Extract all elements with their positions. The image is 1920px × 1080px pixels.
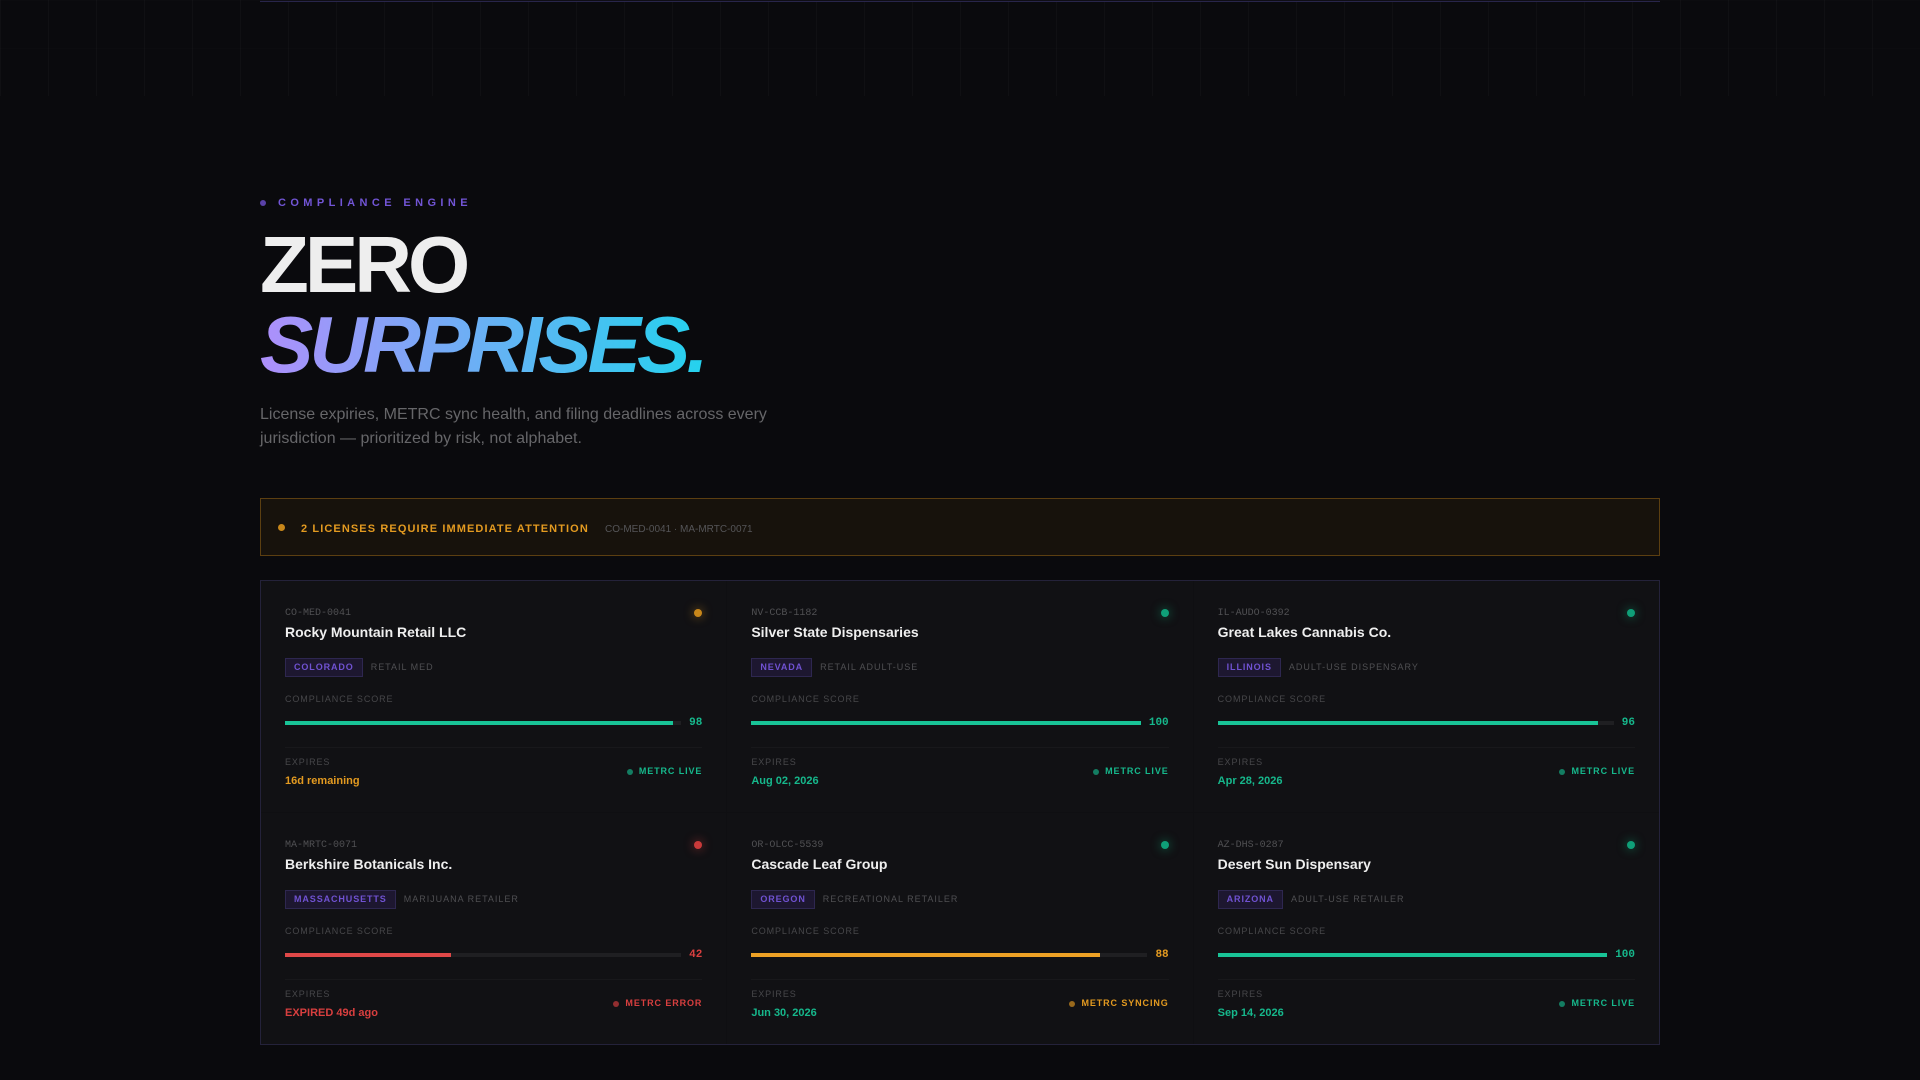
card: Great Lakes Cannabis Co.	[1194, 581, 1659, 812]
card: Cascade Leaf Group: OREGON	[760, 894, 806, 904]
card: Rocky Mountain Retail LLC: METRC LIVE	[639, 766, 702, 776]
title: ZERO	[260, 220, 466, 309]
card: Cascade Leaf Group: Cascade Leaf Group	[751, 856, 887, 872]
card: Berkshire Botanicals Inc.: COMPLIANCE SCORE	[285, 926, 393, 936]
subtitle: jurisdiction — prioritized by risk, not alphabet.	[260, 430, 582, 447]
card: Rocky Mountain Retail LLC: CO-MED-0041	[285, 608, 351, 619]
card: Desert Sun Dispensary: COMPLIANCE SCORE	[1218, 926, 1326, 936]
card: Cascade Leaf Group: METRC SYNCING	[1081, 998, 1169, 1008]
card: Desert Sun Dispensary	[1194, 813, 1659, 1044]
card: Berkshire Botanicals Inc.: MARIJUANA RETAILER	[404, 894, 519, 904]
subtitle: License expiries, METRC sync health, and filing deadlines across every	[260, 406, 767, 423]
card: Cascade Leaf Group: OR-OLCC-5539	[751, 840, 823, 851]
card: Great Lakes Cannabis Co.: 96	[1622, 717, 1635, 729]
card: Desert Sun Dispensary: 100	[1615, 949, 1635, 961]
card: Cascade Leaf Group: Jun 30, 2026	[751, 1006, 817, 1018]
alert banner: CO-MED-0041 · MA-MRTC-0071	[605, 524, 753, 535]
card: Silver State Dispensaries: RETAIL ADULT-USE	[820, 662, 918, 672]
card: Rocky Mountain Retail LLC: 16d remaining	[285, 774, 360, 786]
card: Rocky Mountain Retail LLC: COMPLIANCE SCORE	[285, 694, 393, 704]
card: Great Lakes Cannabis Co.: ADULT-USE DISPENSARY	[1289, 662, 1419, 672]
card: Rocky Mountain Retail LLC	[261, 581, 726, 812]
card: Rocky Mountain Retail LLC: Rocky Mountain Retail LLC	[285, 624, 466, 640]
card: Cascade Leaf Group: RECREATIONAL RETAILER	[823, 894, 958, 904]
card: Silver State Dispensaries: Silver State Dispensaries	[751, 624, 919, 640]
eyebrow label: COMPLIANCE ENGINE	[278, 197, 472, 209]
card: Silver State Dispensaries	[727, 581, 1193, 812]
card: Silver State Dispensaries: Aug 02, 2026	[751, 774, 819, 786]
card: Berkshire Botanicals Inc.: METRC ERROR	[625, 998, 702, 1008]
card: Desert Sun Dispensary: Desert Sun Dispensary	[1218, 856, 1371, 872]
card: Berkshire Botanicals Inc.: MA-MRTC-0071	[285, 840, 357, 851]
card: Berkshire Botanicals Inc.: MASSACHUSETTS	[294, 894, 387, 904]
card: Great Lakes Cannabis Co.: ILLINOIS	[1227, 662, 1272, 672]
card: Cascade Leaf Group	[727, 813, 1193, 1044]
card: Great Lakes Cannabis Co.: Apr 28, 2026	[1218, 774, 1282, 786]
card: Berkshire Botanicals Inc.: 42	[689, 949, 702, 961]
alert banner: 2 LICENSES REQUIRE IMMEDIATE ATTENTION	[301, 523, 589, 535]
card: Silver State Dispensaries: 100	[1149, 717, 1169, 729]
card: Rocky Mountain Retail LLC: COLORADO	[294, 662, 354, 672]
title	[260, 220, 705, 389]
card: Rocky Mountain Retail LLC: RETAIL MED	[371, 662, 434, 672]
alert banner	[260, 498, 1660, 556]
card: Desert Sun Dispensary: Sep 14, 2026	[1218, 1006, 1284, 1018]
card: Cascade Leaf Group: EXPIRES	[751, 989, 797, 999]
previous section edge	[260, 0, 1660, 2]
card: Berkshire Botanicals Inc.: EXPIRED 49d ago	[285, 1006, 378, 1018]
card: Silver State Dispensaries: NV-CCB-1182	[751, 608, 817, 619]
card: Great Lakes Cannabis Co.: IL-AUDO-0392	[1218, 608, 1290, 619]
card: Silver State Dispensaries: NEVADA	[760, 662, 803, 672]
subtitle	[260, 406, 767, 447]
card: Berkshire Botanicals Inc.: EXPIRES	[285, 989, 330, 999]
card: Great Lakes Cannabis Co.: COMPLIANCE SCORE	[1218, 694, 1326, 704]
card: Cascade Leaf Group: COMPLIANCE SCORE	[751, 926, 860, 936]
card: Berkshire Botanicals Inc.	[261, 813, 726, 1044]
card: Rocky Mountain Retail LLC: 98	[689, 717, 702, 729]
license card grid	[260, 580, 1660, 1045]
card: Desert Sun Dispensary: ARIZONA	[1227, 894, 1274, 904]
card: Rocky Mountain Retail LLC: EXPIRES	[285, 757, 330, 767]
card: Desert Sun Dispensary: METRC LIVE	[1571, 998, 1635, 1008]
card: Great Lakes Cannabis Co.: Great Lakes Cannabis Co.	[1218, 624, 1391, 640]
card: Great Lakes Cannabis Co.: EXPIRES	[1218, 757, 1263, 767]
card: Berkshire Botanicals Inc.: Berkshire Botanicals Inc.	[285, 856, 452, 872]
card: Silver State Dispensaries: COMPLIANCE SCORE	[751, 694, 860, 704]
card: Great Lakes Cannabis Co.: METRC LIVE	[1571, 766, 1635, 776]
card: Cascade Leaf Group: 88	[1155, 949, 1169, 961]
card: Desert Sun Dispensary: AZ-DHS-0287	[1218, 840, 1284, 851]
card: Silver State Dispensaries: EXPIRES	[751, 757, 797, 767]
background grid lines	[0, 0, 1920, 96]
card: Silver State Dispensaries: METRC LIVE	[1105, 766, 1169, 776]
card: Desert Sun Dispensary: EXPIRES	[1218, 989, 1263, 999]
title: SURPRISES.	[260, 300, 705, 389]
card: Desert Sun Dispensary: ADULT-USE RETAILER	[1291, 894, 1404, 904]
